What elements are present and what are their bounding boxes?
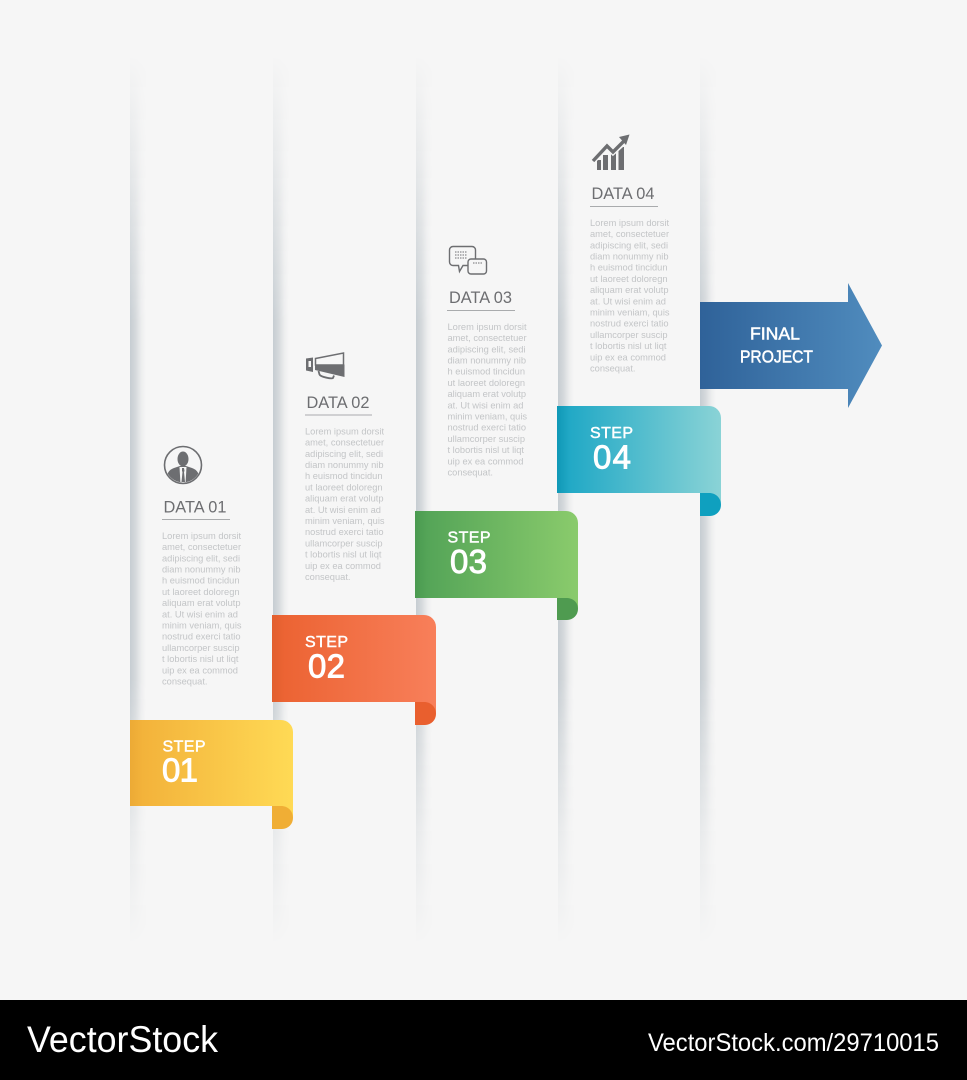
text block: data 04: ullamcorper suscip [590, 330, 668, 340]
step 04 banner: 04 [593, 438, 631, 476]
text block: data 01: uip ex ea commod [162, 665, 238, 675]
text block: data 02: ut laoreet doloregn [305, 482, 383, 492]
icon: businessman [164, 446, 202, 484]
step 03 banner: STEP [448, 530, 490, 546]
text block: data 02 [305, 426, 385, 582]
step 01 banner: STEP [162, 738, 206, 756]
text block: data 03: adipiscing elit, sedi [448, 344, 526, 354]
step 02 banner: STEP [305, 634, 348, 651]
text block: data 02: t lobortis nisl ut liqt [305, 550, 382, 560]
text block: data 01: consequat. [162, 676, 208, 686]
text block: data 04: at. Ut wisi enim ad [590, 296, 666, 306]
step 02 banner: 02 [308, 648, 345, 684]
text block: data 04: amet, consectetuer [590, 229, 669, 239]
icon: megaphone [306, 353, 344, 378]
heading: data 02: DATA 02 [306, 393, 370, 412]
text block: data 03: uip ex ea commod [448, 456, 523, 466]
text block: data 01: minim veniam, quis [162, 620, 242, 630]
panel: data 03 [447, 246, 527, 478]
text block: data 02: aliquam erat volutp [305, 494, 384, 504]
icon: growth chart [593, 134, 630, 170]
text block: data 03: consequat. [448, 468, 493, 478]
text block: data 03: minim veniam, quis [448, 412, 527, 422]
text block: data 04: adipiscing elit, sedi [590, 240, 668, 250]
panel: data 01 [162, 446, 242, 686]
arrow: final project: FINAL [750, 323, 800, 343]
text block: data 03: at. Ut wisi enim ad [448, 400, 523, 410]
icon: speech bubbles [450, 246, 486, 274]
text block: data 04: Lorem ipsum dorsit [590, 218, 669, 228]
text block: data 02: consequat. [305, 572, 350, 582]
text block: data 01: aliquam erat volutp [162, 598, 241, 608]
heading: data 04: DATA 04 [592, 184, 654, 203]
text block: data 04: minim veniam, quis [590, 308, 670, 318]
text block: data 03: diam nonummy nib [448, 356, 526, 366]
text block: data 04: consequat. [590, 364, 636, 374]
footer: brand: VectorStock [27, 1019, 218, 1060]
text block: data 04: t lobortis nisl ut liqt [590, 341, 667, 351]
text block: data 02: amet, consectetuer [305, 438, 384, 448]
text block: data 03: ut laoreet doloregn [448, 378, 525, 388]
step 03 banner [415, 511, 578, 620]
text block: data 01: ullamcorper suscip [162, 643, 240, 653]
panel: data 04 [590, 134, 670, 374]
text block: data 04 [590, 218, 670, 374]
step 04 banner: STEP [590, 425, 633, 442]
text block: data 04: diam nonummy nib [590, 252, 669, 262]
footer bar [0, 1000, 967, 1080]
step 02 banner [272, 615, 436, 725]
text block: data 01: amet, consectetuer [162, 542, 241, 552]
text block: data 02: h euismod tincidun [305, 471, 383, 481]
text block: data 02: minim veniam, quis [305, 516, 385, 526]
text block: data 02: nostrud exerci tatio [305, 527, 384, 537]
text block: data 02: ullamcorper suscip [305, 538, 383, 548]
text block: data 01 [162, 531, 242, 686]
step 01 banner: 01 [162, 752, 198, 788]
text block: data 02: diam nonummy nib [305, 460, 384, 470]
step 03 banner: 03 [450, 543, 487, 580]
column fold shadows [130, 109, 712, 878]
footer: url: VectorStock.com/29710015 [648, 1029, 939, 1057]
text block: data 04: ut laoreet doloregn [590, 274, 668, 284]
text block: data 02: at. Ut wisi enim ad [305, 505, 381, 515]
text block: data 03: Lorem ipsum dorsit [448, 322, 527, 332]
text block: data 03: aliquam erat volutp [448, 389, 526, 399]
text block: data 04: h euismod tincidun [590, 263, 668, 273]
arrow: final project [700, 283, 882, 408]
text block: data 01: diam nonummy nib [162, 564, 241, 574]
text block: data 03 [448, 322, 527, 478]
arrow: final project: PROJECT [740, 346, 813, 366]
text block: data 01: at. Ut wisi enim ad [162, 609, 238, 619]
text block: data 01: Lorem ipsum dorsit [162, 531, 241, 541]
text block: data 04: nostrud exerci tatio [590, 319, 669, 329]
panel: data 02 [305, 353, 385, 582]
step 04 banner [557, 406, 721, 516]
text block: data 01: t lobortis nisl ut liqt [162, 654, 239, 664]
text block: data 01: nostrud exerci tatio [162, 632, 241, 642]
text block: data 03: ullamcorper suscip [448, 434, 525, 444]
step 01 banner [130, 720, 293, 829]
text block: data 03: t lobortis nisl ut liqt [448, 445, 524, 455]
text block: data 01: ut laoreet doloregn [162, 587, 240, 597]
heading: data 03: DATA 03 [449, 288, 512, 307]
text block: data 02: Lorem ipsum dorsit [305, 426, 384, 436]
text block: data 04: uip ex ea commod [590, 352, 666, 362]
text block: data 02: adipiscing elit, sedi [305, 449, 383, 459]
text block: data 03: h euismod tincidun [448, 367, 525, 377]
heading: data 01: DATA 01 [164, 498, 226, 517]
text block: data 03: nostrud exerci tatio [448, 423, 526, 433]
text block: data 01: h euismod tincidun [162, 576, 240, 586]
text block: data 01: adipiscing elit, sedi [162, 553, 240, 563]
text block: data 04: aliquam erat volutp [590, 285, 669, 295]
text block: data 03: amet, consectetuer [448, 333, 527, 343]
text block: data 02: uip ex ea commod [305, 561, 381, 571]
